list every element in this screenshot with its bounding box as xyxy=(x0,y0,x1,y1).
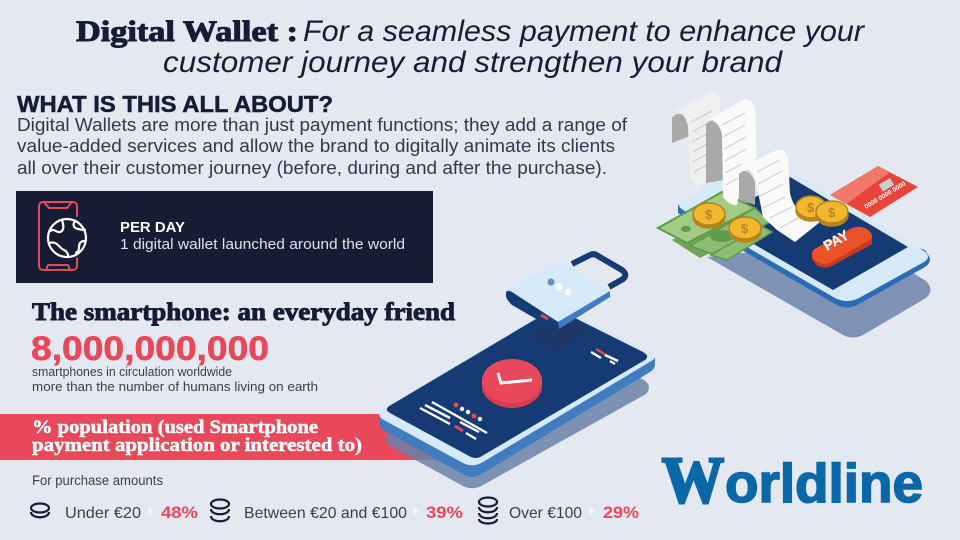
title: customer journey and strengthen your brand xyxy=(163,46,783,79)
phone shadow xyxy=(385,378,649,488)
illustration: phone with payment: $ xyxy=(741,221,749,236)
phone body xyxy=(379,358,655,477)
heading: what is this all about: WHAT IS THIS ALL ABOUT? xyxy=(17,91,333,117)
phone screen xyxy=(387,310,647,458)
purchase row: between 20 and 100 xyxy=(211,500,463,522)
illustration: phone with payment xyxy=(658,93,930,337)
illustration: phone with payment: $ xyxy=(807,200,815,215)
illustration: phone with padlock xyxy=(379,254,655,488)
big number: 8,000,000,000 xyxy=(31,330,269,368)
per day text xyxy=(120,219,405,253)
phone shadow xyxy=(707,240,930,338)
pay button: PAY xyxy=(820,226,852,254)
panel: per day xyxy=(16,191,433,283)
purchase row: between 20 and 100: Between €20 and €100 xyxy=(244,505,407,522)
heading: the smartphone: The smartphone: an everyday friend xyxy=(32,299,455,326)
purchase row: under 20 xyxy=(31,503,198,522)
pay button xyxy=(812,226,872,268)
receipt front xyxy=(739,150,820,242)
red band: % population: % population (used Smartphone xyxy=(32,417,318,438)
purchase amounts label: For purchase amounts xyxy=(32,473,163,488)
title: For a seamless payment to enhance your xyxy=(303,15,865,48)
screen text right xyxy=(591,349,618,364)
logo: Worldline: W xyxy=(662,444,724,517)
banknotes xyxy=(658,192,772,260)
intro paragraph xyxy=(17,115,628,178)
icon: coins small xyxy=(31,504,49,517)
credit card: 0000 0000 0000 xyxy=(863,180,908,211)
padlock xyxy=(506,254,625,329)
red band: % population xyxy=(0,414,440,460)
smartphones caption xyxy=(32,365,318,394)
screen text left xyxy=(420,402,487,439)
credit card xyxy=(830,166,918,217)
intro paragraph: all over their customer journey (before, during and after the purchase). xyxy=(17,158,607,178)
purchase row: between 20 and 100: 39% xyxy=(426,503,463,522)
intro paragraph: Digital Wallets are more than just payment functions; they add a range of xyxy=(17,115,628,135)
illustration: phone with payment: $ xyxy=(828,205,836,220)
icon: phone with globe xyxy=(39,202,86,270)
purchase row: under 20: 48% xyxy=(161,503,198,522)
logo: Worldline: orldline xyxy=(725,452,923,514)
receipt back xyxy=(672,93,722,187)
purchase row: over 100 xyxy=(479,498,639,524)
lock shadow xyxy=(527,316,590,352)
icon: coins medium xyxy=(211,500,229,521)
receipt middle xyxy=(706,100,757,205)
purchase row: over 100: Over €100 xyxy=(509,505,582,522)
purchase row: under 20: Under €20 xyxy=(65,505,141,522)
red band: % population: payment application or interested to) xyxy=(32,435,362,456)
purchase row: over 100: 29% xyxy=(603,503,639,522)
phone screen xyxy=(714,177,908,290)
coins xyxy=(693,196,848,242)
title xyxy=(76,15,865,79)
title: Digital Wallet : xyxy=(76,15,298,48)
logo: Worldline xyxy=(662,444,923,517)
smartphones caption: more than the number of humans living on earth xyxy=(32,380,318,394)
phone body xyxy=(678,200,930,308)
smartphones caption: smartphones in circulation worldwide xyxy=(32,365,232,379)
icon: check button xyxy=(482,359,542,408)
per day text: 1 digital wallet launched around the world xyxy=(120,236,405,253)
per day text: PER DAY xyxy=(120,219,185,236)
icon: coins large xyxy=(479,498,497,524)
illustration: phone with payment: $ xyxy=(705,207,713,222)
intro paragraph: value-added services and allow the brand to digitally animate its clients xyxy=(17,136,615,156)
